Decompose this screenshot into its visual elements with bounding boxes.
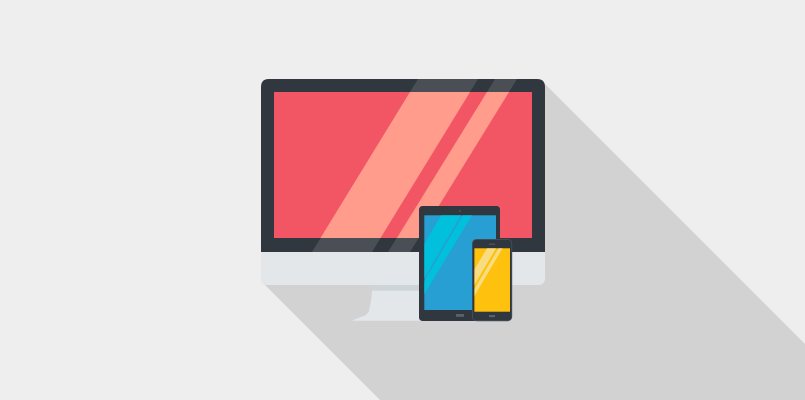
- phone: [472, 239, 512, 321]
- monitor bezel: [261, 79, 545, 252]
- tablet home button: [456, 314, 464, 317]
- monitor stand: [352, 285, 425, 321]
- tablet screen: [424, 215, 496, 310]
- phone glare: [474, 248, 502, 296]
- screen glare: [312, 79, 517, 252]
- monitor screen: [274, 92, 532, 238]
- phone home button: [489, 315, 495, 317]
- tablet camera: [459, 210, 461, 212]
- tablet glare: [424, 215, 472, 294]
- monitor chin: [261, 250, 545, 285]
- monitor: [261, 79, 545, 321]
- long diagonal shadow: [263, 80, 805, 400]
- tablet: [419, 206, 500, 321]
- phone speaker: [489, 244, 495, 245]
- phone screen: [474, 248, 510, 312]
